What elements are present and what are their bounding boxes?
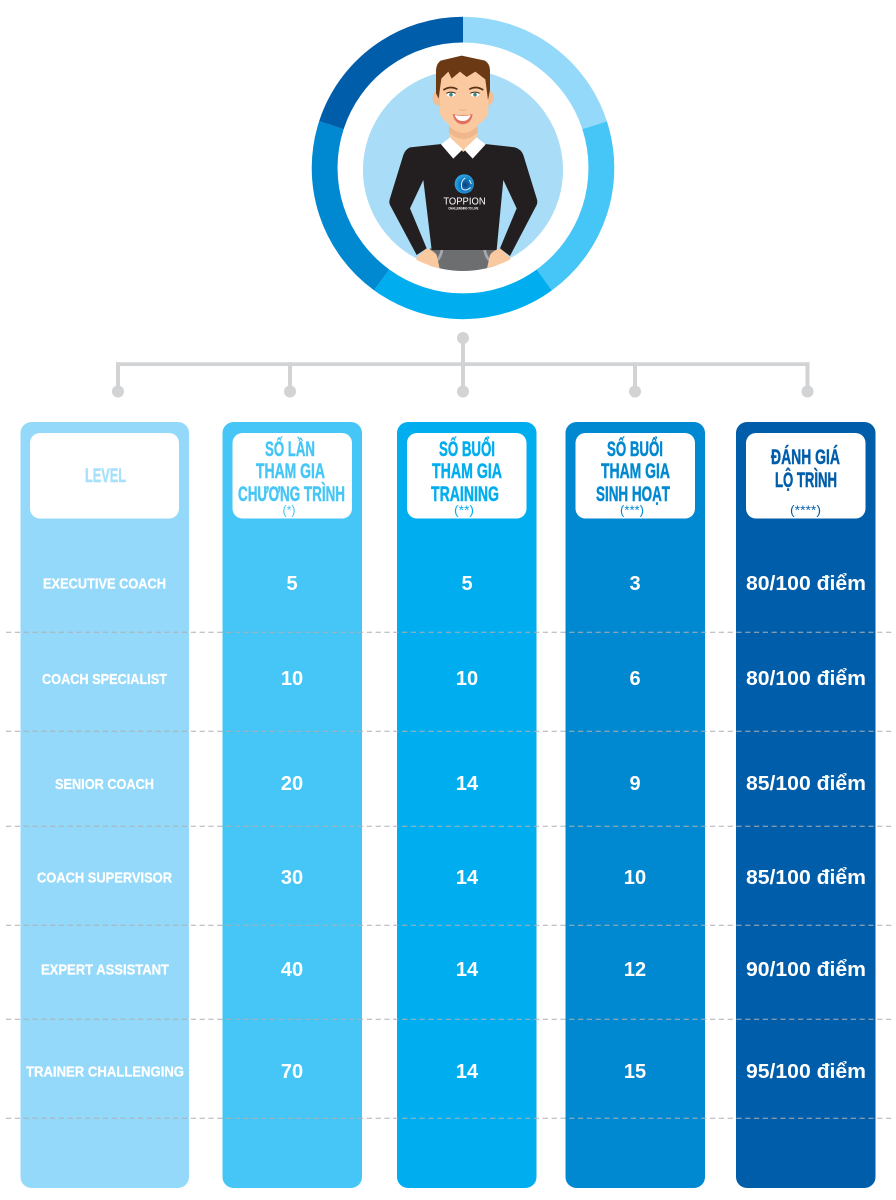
header: training sessions: THAM GIA [432,460,502,483]
sweater [389,144,537,256]
header: program participation: CHƯƠNG TRÌNH [238,483,345,506]
score values: 85/100 điểm [746,867,866,889]
score values: 90/100 điểm [746,959,866,981]
values: 10 [281,668,303,690]
level names: EXECUTIVE COACH [43,576,166,592]
column: activity sessions [566,422,705,1188]
header: activity sessions: (***) [620,502,644,518]
values: 15 [624,1061,646,1083]
values: 30 [281,867,303,889]
header: training sessions: TRAINING [431,483,499,506]
header: roadmap assessment: (****) [790,502,821,518]
mouth [453,114,473,124]
header: activity sessions: SỐ BUỔI [607,437,663,461]
values: 12 [624,959,646,981]
column: level [20,422,189,1188]
hair [436,56,490,100]
header: level: LEVEL [85,466,126,487]
logo tagline: CHALLENGING TO LIVE [448,207,479,211]
values: 70 [281,1061,303,1083]
ring segment 5 [331,30,463,125]
neck shadow [449,126,478,139]
header: activity sessions: THAM GIA [601,460,670,483]
values: 20 [281,773,303,795]
header: program participation: THAM GIA [256,460,325,483]
values: 14 [456,867,479,889]
hands [416,248,511,270]
values: 9 [629,773,641,795]
header: program participation: (*) [282,502,296,518]
header: level [30,433,179,518]
column: roadmap assessment [736,422,876,1188]
values: 40 [281,959,303,981]
values: 3 [629,573,641,595]
face [440,70,488,132]
values: 5 [286,573,298,595]
logo wordmark: TOPPION [443,197,486,208]
neck [449,120,478,152]
column: training sessions [397,422,536,1188]
level names: COACH SUPERVISOR [37,870,172,886]
collar [441,137,486,159]
header: training sessions: (**) [454,502,474,518]
ring segment 4 [325,125,382,280]
header: program participation: SỐ LẦN [265,437,315,461]
values: 6 [629,668,641,690]
header: roadmap assessment: LỘ TRÌNH [775,468,837,492]
avatar background circle [363,70,563,270]
header: program participation [232,433,352,518]
values [624,573,646,1083]
level names: TRAINER CHALLENGING [26,1064,184,1080]
header: roadmap assessment [746,433,866,518]
ring segment 3 [382,280,544,306]
level names: EXPERT ASSISTANT [41,962,169,978]
values: 10 [624,867,646,889]
donut ring [325,30,601,306]
score values: 80/100 điểm [746,573,866,595]
logo glyph [461,178,471,190]
eyes [446,92,480,97]
score values: 95/100 điểm [746,1061,866,1083]
logo globe [455,174,474,194]
values: 14 [456,959,479,981]
values [281,573,303,1083]
header: activity sessions: SINH HOẠT [596,483,670,506]
header: activity sessions [576,433,695,518]
ring segment 1 [463,30,595,125]
ears [433,91,493,106]
header: training sessions: SỐ BUỔI [439,437,495,461]
header: training sessions [407,433,526,518]
values: 14 [456,1061,479,1083]
score values: 85/100 điểm [746,773,866,795]
trousers [430,248,498,271]
score values [746,573,866,1083]
level names: COACH SPECIALIST [42,671,167,688]
connector tree [112,332,814,398]
eyebrows [443,87,483,90]
values: 14 [456,773,479,795]
illustration: coach character [389,56,537,278]
ring segment 2 [544,125,601,280]
values: 10 [456,668,478,690]
values: 5 [461,573,473,595]
level names [26,576,184,1080]
score values: 80/100 điểm [746,668,866,690]
values [456,573,479,1083]
column: program participation [222,422,362,1188]
level names: SENIOR COACH [55,776,154,793]
nose [459,108,467,112]
teeth [455,115,471,121]
header: roadmap assessment: ĐÁNH GIÁ [771,446,840,469]
